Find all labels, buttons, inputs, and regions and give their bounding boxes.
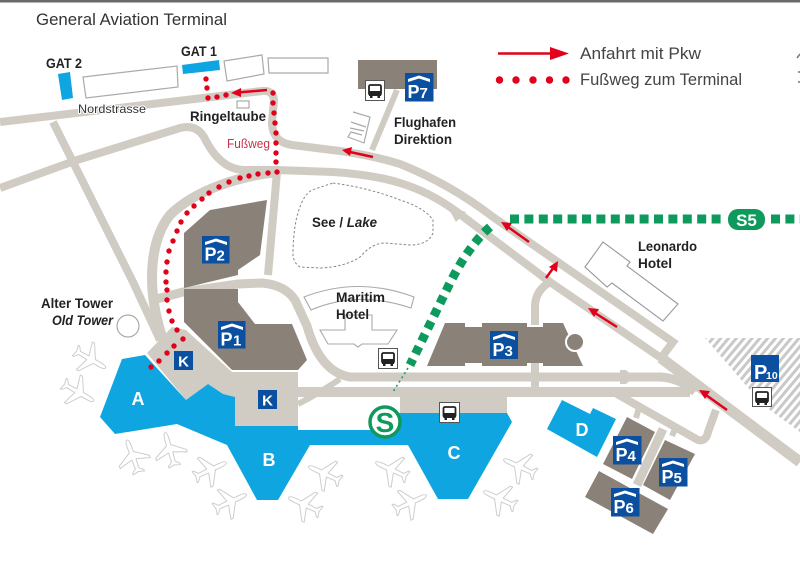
P10 sign: P — [754, 362, 767, 384]
label Maritim Hotel — [336, 289, 385, 322]
P5 sign: 5 — [674, 470, 682, 487]
terminals A and B — [100, 355, 400, 500]
P4 sign — [613, 436, 642, 465]
label Alter Tower / Old Tower: Old Tower — [52, 312, 114, 328]
S-Bahn station symbol — [370, 407, 400, 438]
P2 sign: P — [204, 244, 217, 264]
road network — [0, 90, 800, 485]
S-Bahn green route — [410, 219, 800, 365]
hatched area P10 — [705, 338, 800, 432]
gray apron area with K parking — [147, 327, 298, 426]
bus icon terminal C — [440, 402, 460, 422]
legend: car arrow — [498, 47, 569, 60]
K sign near B: K — [262, 392, 273, 410]
parking building P7 — [358, 60, 437, 89]
bus icon P7 — [366, 80, 384, 100]
label Leonardo Hotel: Leonardo — [638, 238, 697, 254]
P1 sign — [218, 321, 246, 350]
red walking route — [148, 76, 280, 370]
label Flughafen Direktion: Direktion — [394, 131, 452, 147]
K sign near A — [174, 351, 193, 370]
P1 sign: 1 — [233, 332, 241, 350]
parking building P4 — [603, 417, 655, 479]
P3 sign: 3 — [504, 343, 513, 360]
P5 sign: P — [662, 467, 674, 487]
airplanes — [55, 337, 542, 527]
red car arrows — [231, 88, 727, 410]
small building near P7 — [348, 112, 370, 143]
legend: walking dots — [496, 76, 570, 84]
K sign near B — [258, 390, 277, 410]
legend: car label: Anfahrt mit Pkw — [580, 45, 701, 63]
P4 sign: 4 — [628, 448, 636, 465]
P6 sign — [611, 488, 640, 517]
terminal letter A: A — [132, 389, 144, 409]
P3 sign: P — [492, 340, 505, 360]
parking building P2 — [184, 200, 267, 288]
K sign near A: K — [178, 354, 189, 370]
P6 sign: P — [614, 497, 626, 517]
terminal letter C: C — [448, 443, 460, 463]
parking building P3 — [427, 323, 584, 366]
P2 sign — [202, 236, 230, 264]
Leonardo hotel outline — [585, 242, 678, 321]
terminal letter B: B — [262, 450, 276, 470]
P10 sign: 10 — [766, 370, 778, 382]
bus icon P10 — [752, 388, 772, 406]
label Alter Tower / Old Tower: Alter Tower — [41, 295, 114, 311]
label Ringeltaube: Ringeltaube — [190, 108, 266, 124]
P3 sign — [490, 331, 518, 360]
terminal D — [547, 400, 616, 457]
terminal C — [395, 413, 512, 499]
P7 sign: 7 — [420, 85, 428, 102]
P5 sign — [659, 458, 688, 487]
parking building P6 — [585, 471, 668, 534]
P7 sign — [405, 73, 434, 102]
S-Bahn station symbol: S — [376, 407, 394, 438]
label Maritim Hotel: Hotel — [336, 306, 369, 322]
P1 sign: P — [220, 330, 233, 350]
GAT 1 building — [182, 60, 220, 74]
GAT 2 building — [58, 72, 73, 100]
parking building P1 — [184, 289, 307, 370]
label Maritim Hotel: Maritim — [336, 289, 385, 305]
terminal letter D: D — [576, 420, 588, 440]
bus icon Maritim — [378, 348, 398, 368]
parking building P5 — [643, 440, 695, 500]
label GAT 1: GAT 1 — [181, 43, 217, 59]
label Flughafen Direktion — [394, 114, 456, 147]
title: General Aviation Terminal — [36, 10, 227, 29]
label See / Lake: See / Lake — [312, 214, 377, 230]
Maritim hotel outline — [304, 286, 414, 347]
label Leonardo Hotel — [638, 238, 697, 271]
label Alter Tower / Old Tower — [41, 295, 114, 328]
label Flughafen Direktion: Flughafen — [394, 114, 456, 130]
legend: walking label: Fußweg zum Terminal — [580, 71, 742, 89]
label GAT 2: GAT 2 — [46, 55, 82, 71]
S5 badge: S5 — [736, 211, 757, 230]
S5 badge — [728, 209, 765, 230]
S-Bahn faded connector — [393, 368, 408, 392]
P6 sign: 6 — [626, 500, 634, 517]
label Fußweg: Fußweg — [227, 136, 270, 151]
top border — [0, 0, 800, 2]
label Leonardo Hotel: Hotel — [638, 255, 672, 271]
label Nordstrasse: Nordstrasse — [78, 102, 146, 116]
old tower circle — [117, 315, 139, 337]
lake outline — [293, 183, 433, 268]
P2 sign: 2 — [216, 248, 225, 264]
P4 sign: P — [616, 445, 628, 465]
cropped legend fragments at right edge — [797, 54, 800, 82]
P7 sign: P — [408, 82, 420, 102]
hangar outlines — [83, 55, 328, 108]
P10 sign — [751, 355, 779, 384]
